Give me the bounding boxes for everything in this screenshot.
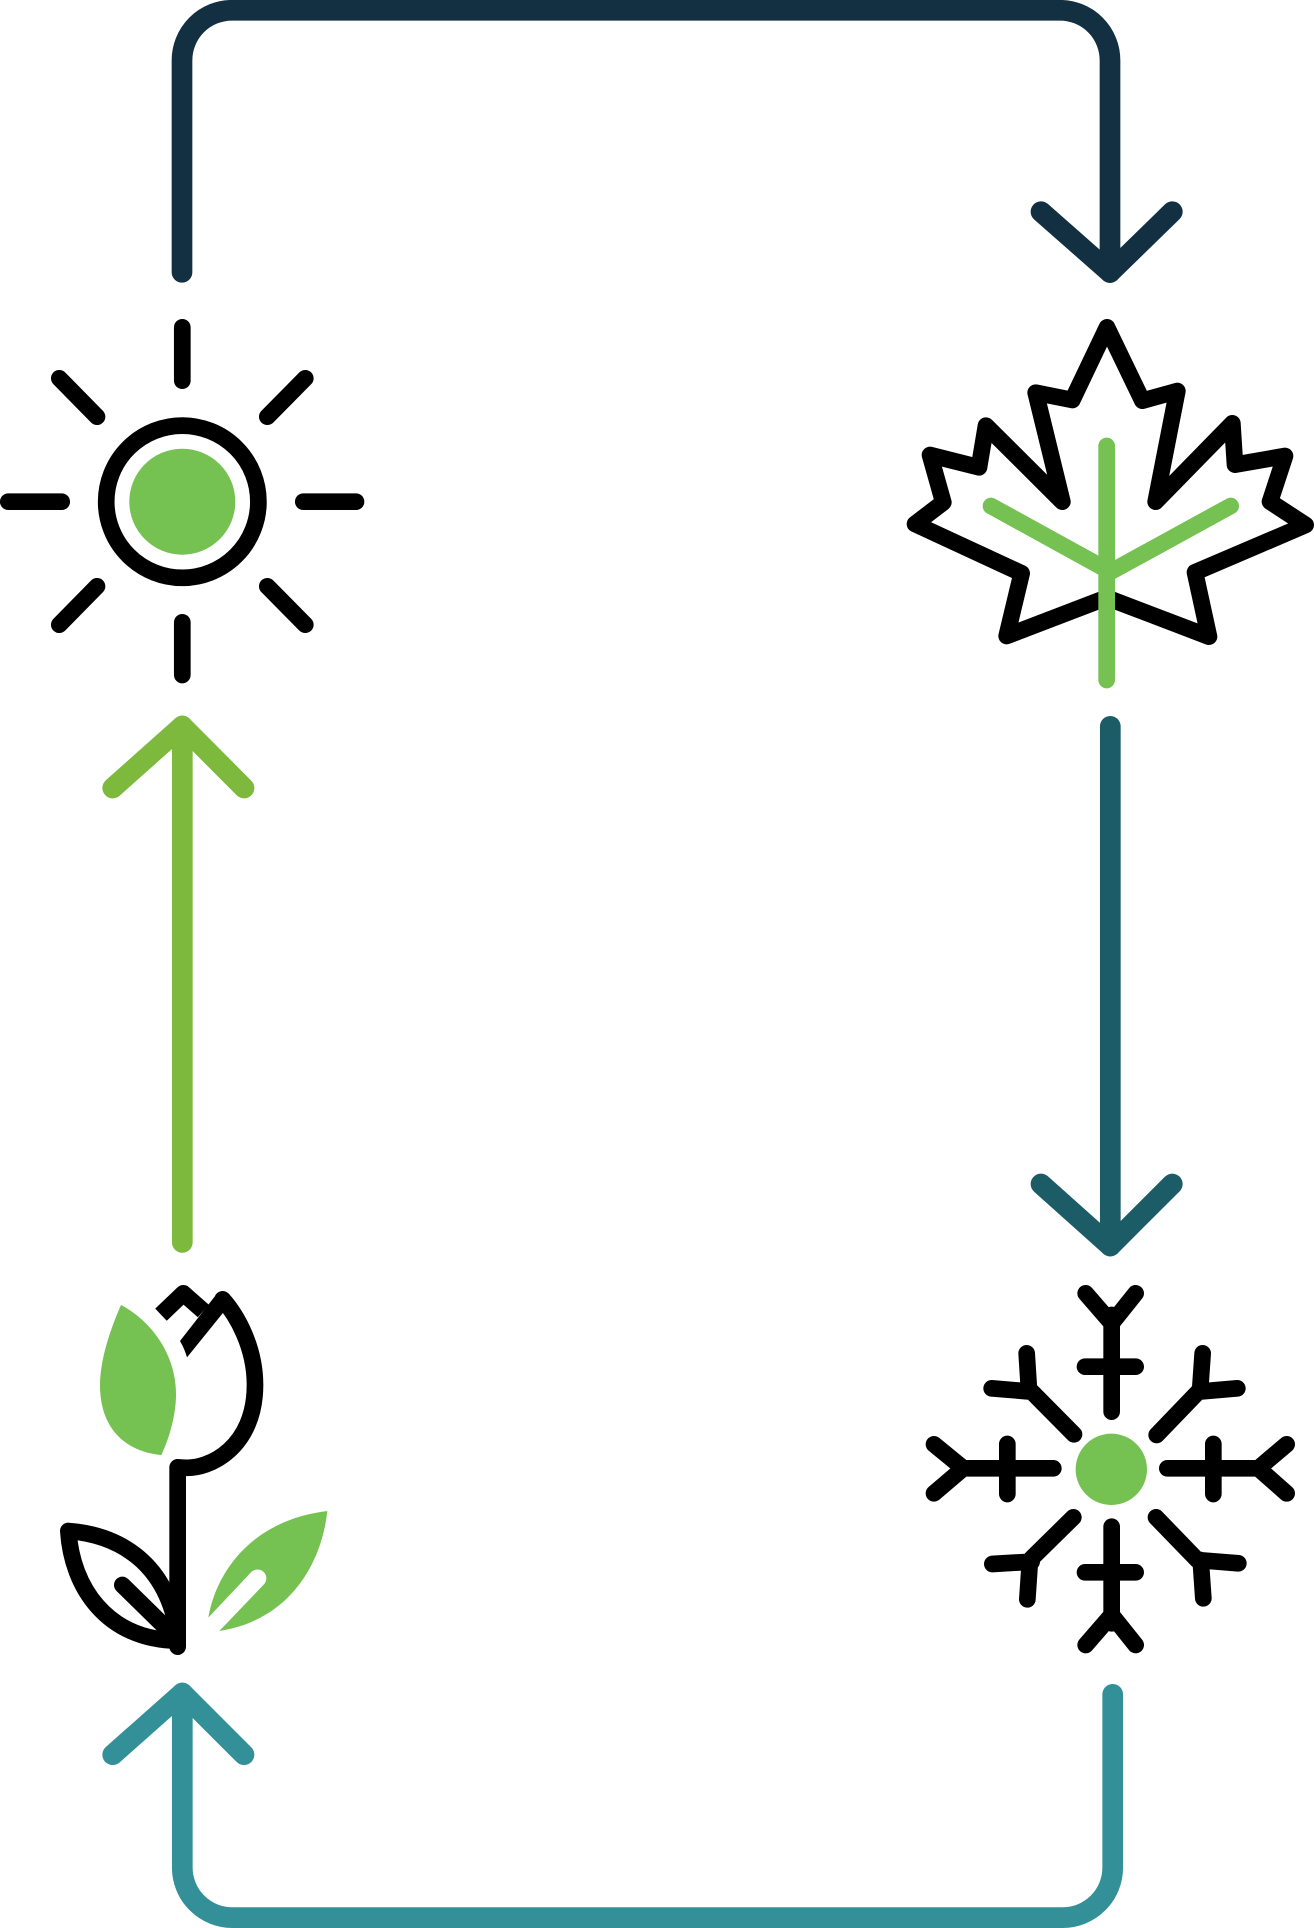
icon: tulip (68, 1293, 327, 1647)
tulip inner petal edge (180, 1294, 224, 1357)
tulip leaf right (208, 1511, 327, 1631)
tulip lower leaf outline (68, 1531, 178, 1641)
tulip petal left (100, 1305, 176, 1455)
sun rays (8, 327, 356, 675)
snowflake core (1076, 1434, 1147, 1505)
leaf veins (991, 446, 1231, 680)
arrow: maple leaf to snowflake (1041, 726, 1172, 1246)
sun ring (106, 426, 258, 578)
tulip notch (161, 1293, 203, 1315)
icon: snowflake (934, 1293, 1287, 1645)
snowflake branches (934, 1293, 1287, 1645)
leaf outline (915, 327, 1306, 637)
arrow: snowflake to tulip (113, 1693, 1113, 1918)
tulip stem and flower outline (178, 1299, 255, 1647)
icon: maple leaf (915, 327, 1306, 680)
arrow: tulip to sun (113, 726, 244, 1242)
icon: sun (8, 327, 356, 675)
sun core (129, 449, 235, 555)
arrow: sun to maple leaf (182, 10, 1172, 273)
